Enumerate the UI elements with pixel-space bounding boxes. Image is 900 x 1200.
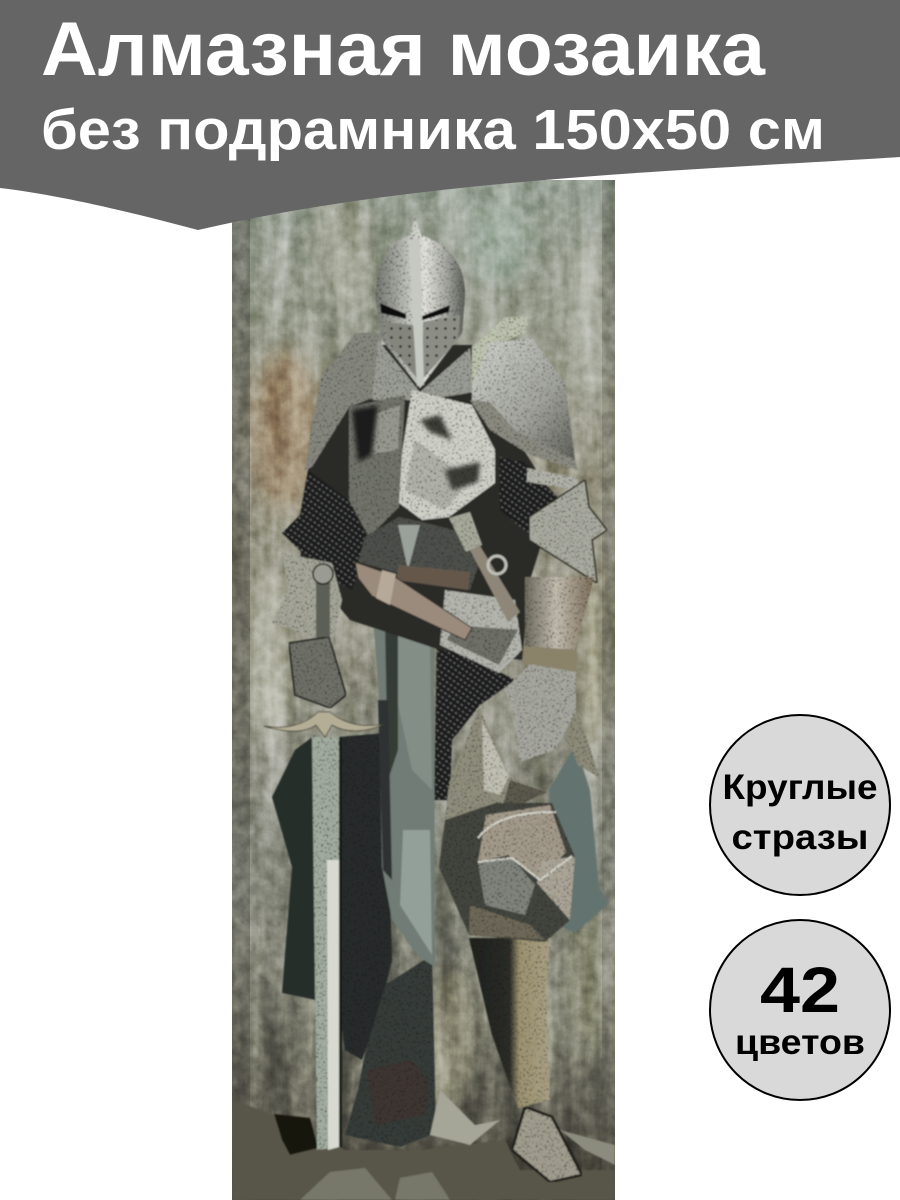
dagger: [449, 512, 520, 622]
greave: [469, 938, 550, 1108]
left pauldron: [305, 333, 382, 470]
title heading: Алмазная мозаика: [41, 7, 766, 92]
sword grip: [313, 564, 333, 652]
knee guard: [439, 803, 575, 942]
badge: 42 colours: [710, 920, 890, 1100]
crossguard: [264, 712, 385, 737]
left vambrace: [272, 553, 342, 643]
right chainmail: [499, 457, 560, 535]
left chainmail: [282, 470, 369, 590]
right foot: [512, 1107, 582, 1182]
right pauldron: [470, 317, 578, 490]
abdomen: [358, 517, 482, 590]
badge: round rhinestones: [710, 715, 890, 895]
belt: [355, 562, 472, 640]
broken stone: [274, 1114, 318, 1155]
ground details: [232, 1090, 615, 1200]
breastplate: [349, 390, 495, 537]
rocks: [300, 1168, 450, 1200]
sword blade: [312, 737, 342, 1150]
left gauntlet: [289, 637, 346, 708]
knight figure: [232, 217, 615, 1200]
badge: 42 colours: цветов: [735, 1023, 865, 1062]
helmet: [376, 217, 465, 388]
fauld plate: [440, 590, 522, 673]
chainmail skirt: [434, 640, 515, 800]
badge: round rhinestones: Круглые: [722, 768, 878, 807]
painted background texture: [232, 180, 615, 1200]
neck collar: [372, 340, 475, 400]
title banner: [0, 0, 900, 230]
left leg: [338, 733, 436, 1147]
knight artwork panel: [232, 180, 618, 1200]
badge: 42 colours: 42: [760, 954, 840, 1026]
right cape: [549, 745, 609, 933]
left cape: [272, 735, 316, 1000]
right gauntlet: [504, 664, 600, 778]
lower tasset: [445, 707, 547, 820]
subtitle: без подрамника 150х50 см: [41, 98, 825, 162]
forearm cuff: [524, 646, 577, 672]
badge: round rhinestones: стразы: [732, 818, 868, 857]
torso underlayer: [300, 345, 555, 660]
tabard: [372, 596, 435, 967]
right forearm: [525, 577, 594, 650]
elbow guard: [529, 480, 607, 583]
